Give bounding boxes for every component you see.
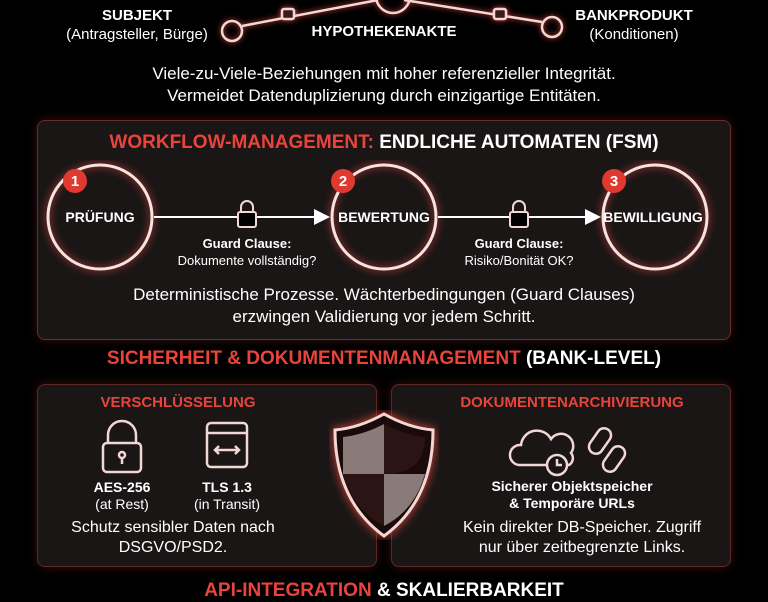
label: bankprodukt: (Konditionen) [589,26,679,43]
icon: lock [102,420,142,474]
FSM diagram: 3 [610,173,618,190]
text: object storage: & Temporäre URLs [509,495,635,511]
text: object storage [491,478,653,511]
FSM diagram: 2 [339,173,347,190]
icon: shield [329,410,439,540]
icon: cloud and link [508,427,626,476]
label: subjekt [66,7,208,43]
description text: Vermeidet Datenduplizierung durch einzigartige Entitäten. [167,86,601,105]
workflow title: WORKFLOW-MANAGEMENT: ENDLICHE AUTOMATEN (FSM) [109,132,659,153]
text: TLS: (in Transit) [194,496,260,512]
encryption description: DSGVO/PSD2. [119,539,227,556]
archive heading: DOKUMENTENARCHIVIERUNG [460,394,684,411]
FSM diagram: Guard Clause: [203,236,291,251]
panel: workflow [37,120,731,340]
description text [152,64,616,105]
archive description: Kein direkter DB-Speicher. Zugriff [463,519,701,536]
security title: SICHERHEIT & DOKUMENTENMANAGEMENT (BANK-LEVEL) [107,348,661,369]
FSM diagram: Dokumente vollständig? [178,253,316,268]
text: TLS: TLS 1.3 [202,479,252,495]
workflow description [133,285,635,326]
panel: archive [391,384,731,567]
panel: encryption [37,384,377,567]
label: hypothekenakte: HYPOTHEKENAKTE [311,23,456,40]
workflow description: Deterministische Prozesse. Wächterbedingungen (Guard Clauses) [133,285,635,304]
FSM diagram: PRÜFUNG [65,209,135,225]
text: AES: AES-256 [94,479,150,495]
label: bankprodukt: BANKPRODUKT [575,7,693,24]
encryption heading: VERSCHLÜSSELUNG [100,394,256,411]
text: AES [94,479,150,512]
API title: API-INTEGRATION & SKALIERBARKEIT [204,580,564,601]
FSM diagram: 1 [71,173,79,190]
encryption description [71,519,275,556]
FSM diagram [40,160,714,276]
network diagram [216,0,568,47]
label: subjekt: SUBJEKT [102,7,172,24]
text: TLS [194,479,260,512]
description text: Viele-zu-Viele-Beziehungen mit hoher referenzieller Integrität. [152,64,616,83]
archive description: nur über zeitbegrenzte Links. [479,539,685,556]
text: object storage: Sicherer Objektspeicher [491,478,653,494]
label: bankprodukt [575,7,693,43]
icon: browser [206,422,248,468]
encryption description: Schutz sensibler Daten nach [71,519,275,536]
text: AES: (at Rest) [95,496,149,512]
label: subjekt: (Antragsteller, Bürge) [66,26,208,43]
archive description [463,519,702,556]
FSM diagram: Risiko/Bonität OK? [464,253,574,268]
FSM diagram: BEWERTUNG [338,209,430,225]
FSM diagram: BEWILLIGUNG [603,209,703,225]
FSM diagram: Guard Clause: [475,236,563,251]
workflow description: erzwingen Validierung vor jedem Schritt. [232,307,536,326]
